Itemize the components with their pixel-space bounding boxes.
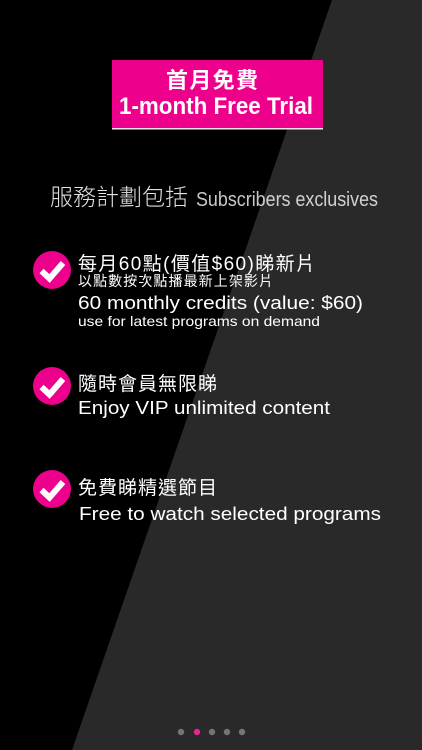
text: monthly credits: 60 monthly credits (value: $60) xyxy=(78,292,363,313)
panel: free trial banner: 首月免費 xyxy=(166,68,258,93)
text: monthly credits: use for latest programs on demand xyxy=(78,313,320,329)
benefit: free selected programs xyxy=(33,470,381,524)
text: monthly credits: 每月60點(價值$60)睇新片 xyxy=(78,253,315,275)
text: VIP unlimited: Enjoy VIP unlimited content xyxy=(78,397,330,418)
heading: subscribers exclusives: 服務計劃包括 xyxy=(50,184,188,210)
icon: pink check xyxy=(33,367,71,405)
heading: subscribers exclusives: Subscribers exclusives xyxy=(196,189,378,211)
icon: pink check xyxy=(33,470,71,508)
text: free selected programs xyxy=(78,477,381,524)
panel: free trial banner xyxy=(112,60,323,130)
icon: pink check xyxy=(33,251,71,289)
text: free selected programs: 免費睇精選節目 xyxy=(78,477,217,499)
benefit: VIP unlimited xyxy=(33,367,330,418)
text: monthly credits: 以點數按次點播最新上架影片 xyxy=(78,273,273,289)
text: VIP unlimited xyxy=(78,373,330,418)
benefit: monthly credits xyxy=(33,251,363,329)
pagination dots xyxy=(178,729,245,735)
text: free selected programs: Free to watch selected programs xyxy=(79,503,381,524)
panel: free trial banner: 1-month Free Trial xyxy=(119,93,313,120)
text: monthly credits xyxy=(78,253,363,329)
heading: subscribers exclusives xyxy=(50,184,378,211)
text: VIP unlimited: 隨時會員無限睇 xyxy=(78,373,217,395)
